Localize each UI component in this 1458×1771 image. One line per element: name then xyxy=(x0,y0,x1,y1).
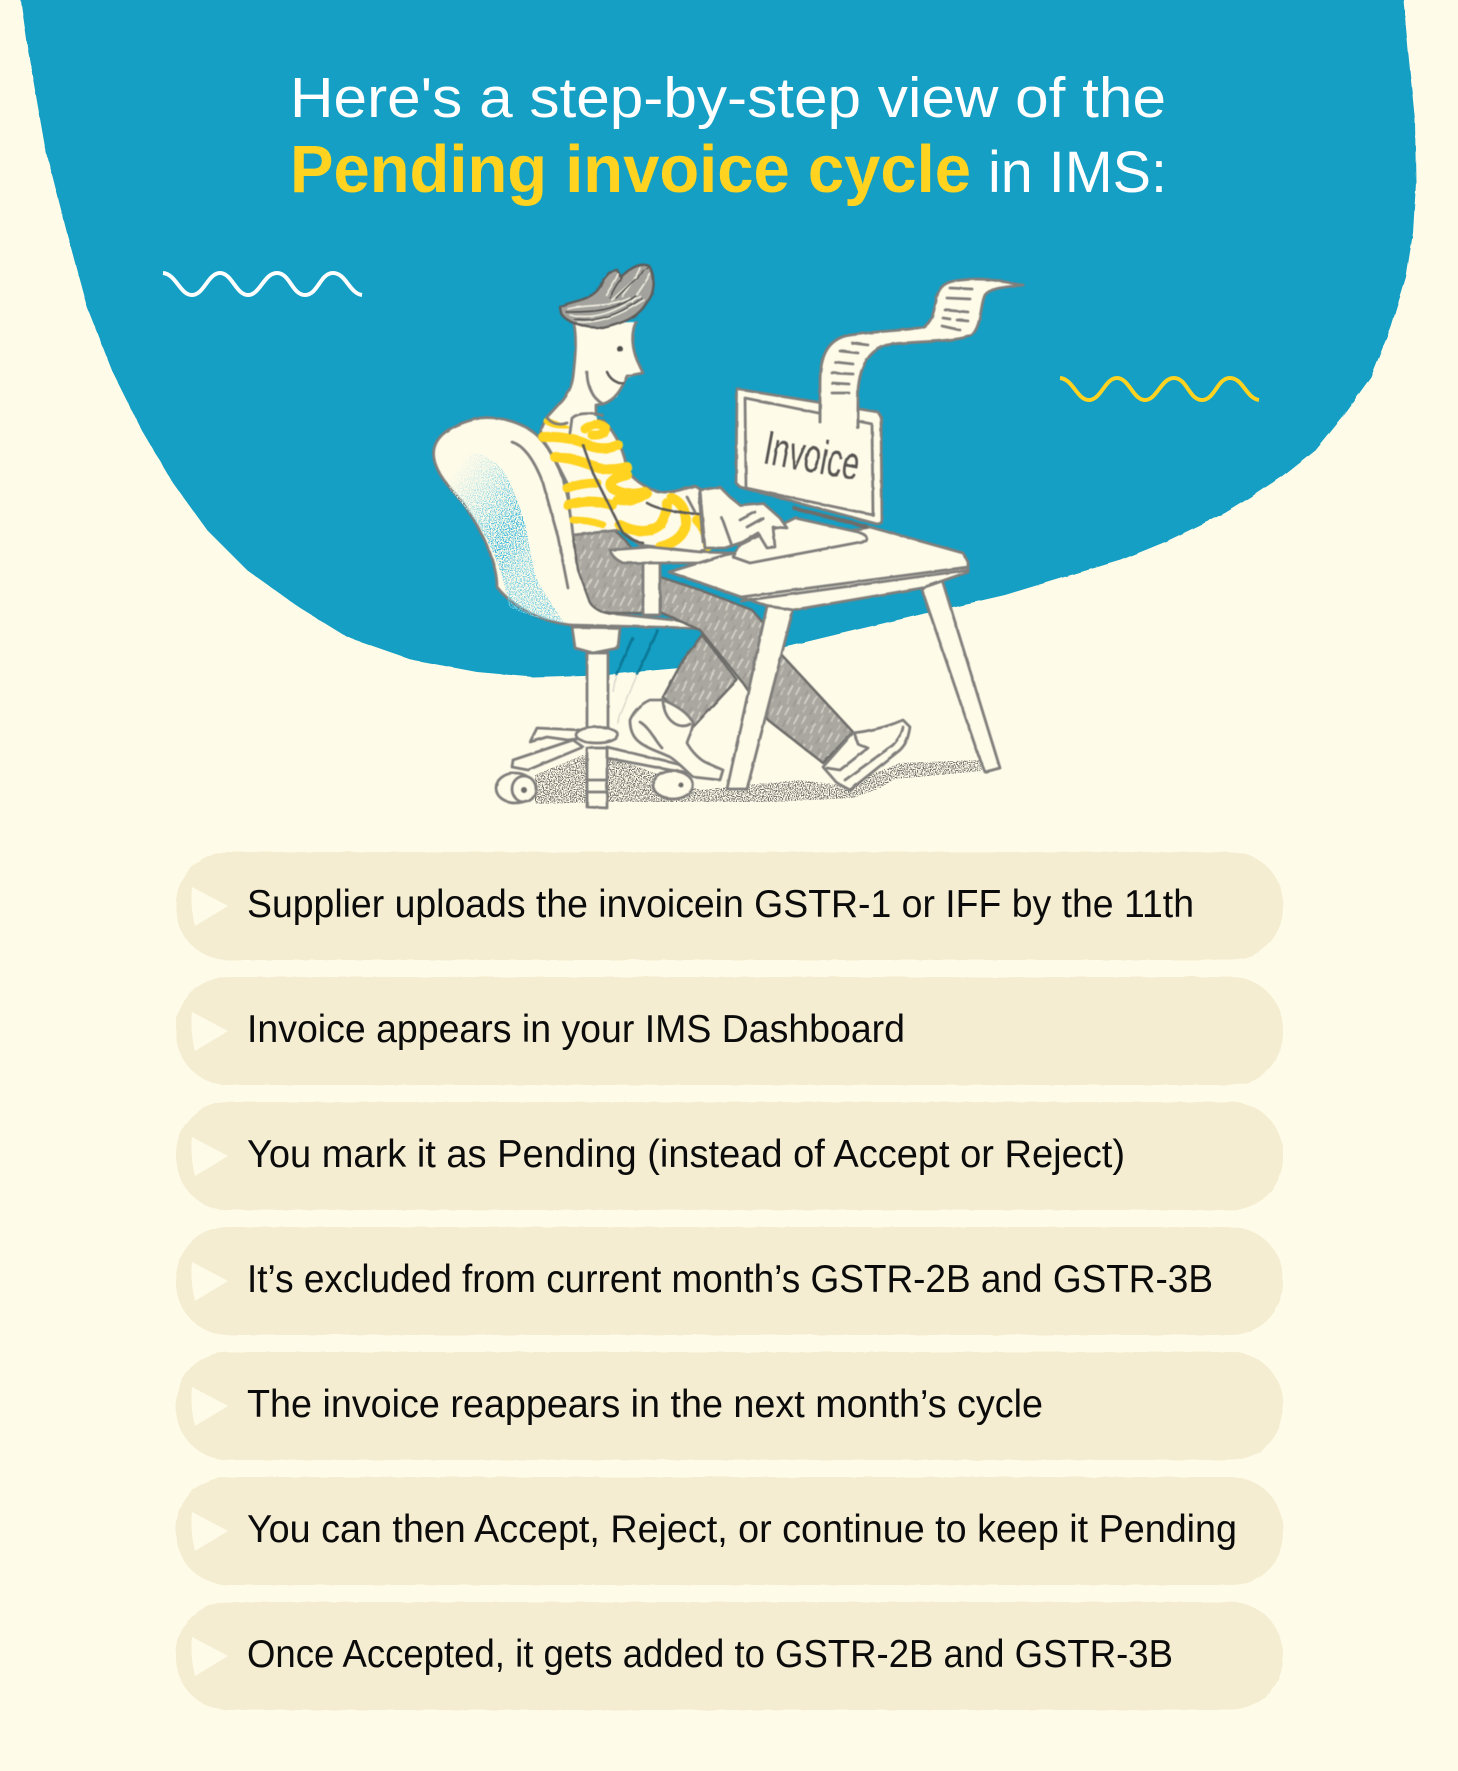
hand xyxy=(700,487,787,548)
sweater stripes xyxy=(543,421,708,547)
front leg xyxy=(660,577,853,763)
illustration: person at desk with invoice xyxy=(434,265,1023,808)
title end: in IMS: xyxy=(988,140,1167,205)
step 2 xyxy=(176,977,1283,1085)
step 1: Supplier uploads the invoicein GSTR-1 or IFF by the 11th xyxy=(247,883,1194,926)
step 7: Once Accepted, it gets added to GSTR-2B and GSTR-3B xyxy=(247,1633,1173,1676)
step 3 xyxy=(176,1102,1283,1210)
step 1 xyxy=(176,852,1283,960)
seated trousers xyxy=(573,528,645,613)
step 6 xyxy=(176,1477,1283,1585)
blue header blob xyxy=(20,0,1416,677)
motion lines xyxy=(613,630,658,723)
keyboard xyxy=(733,518,867,563)
title line 1: Here's a step-by-step view of the xyxy=(290,66,1166,130)
monitor label: Invoice xyxy=(760,422,864,491)
floor shadow xyxy=(535,755,982,804)
step 3: You mark it as Pending (instead of Accept or Reject) xyxy=(247,1133,1125,1176)
title xyxy=(290,66,1167,207)
hair xyxy=(560,265,654,328)
sweater fold lines xyxy=(583,445,723,543)
back leg and shoe xyxy=(630,635,737,780)
step 7 xyxy=(176,1602,1283,1710)
step list xyxy=(176,852,1283,1710)
torso sweater xyxy=(540,417,712,552)
armrest and post xyxy=(610,547,737,615)
paper strip xyxy=(820,279,1023,428)
step 6: You can then Accept, Reject, or continue to keep it Pending xyxy=(247,1508,1237,1551)
chair base xyxy=(496,627,693,808)
desk xyxy=(669,527,1000,789)
step 4: It’s excluded from current month’s GSTR-2B and GSTR-3B xyxy=(247,1258,1213,1301)
white wave decoration xyxy=(163,273,362,295)
yellow wave decoration xyxy=(1060,378,1259,400)
step 5: The invoice reappears in the next month’s cycle xyxy=(247,1383,1043,1426)
chair blue speckle xyxy=(442,453,564,623)
step 4 xyxy=(176,1227,1283,1335)
title highlight: Pending invoice cycle xyxy=(290,132,971,207)
front shoe xyxy=(823,720,910,790)
step 2: Invoice appears in your IMS Dashboard xyxy=(247,1008,905,1051)
step 5 xyxy=(176,1352,1283,1460)
monitor xyxy=(736,389,882,527)
chair shell xyxy=(434,418,697,628)
head and neck xyxy=(547,322,643,433)
